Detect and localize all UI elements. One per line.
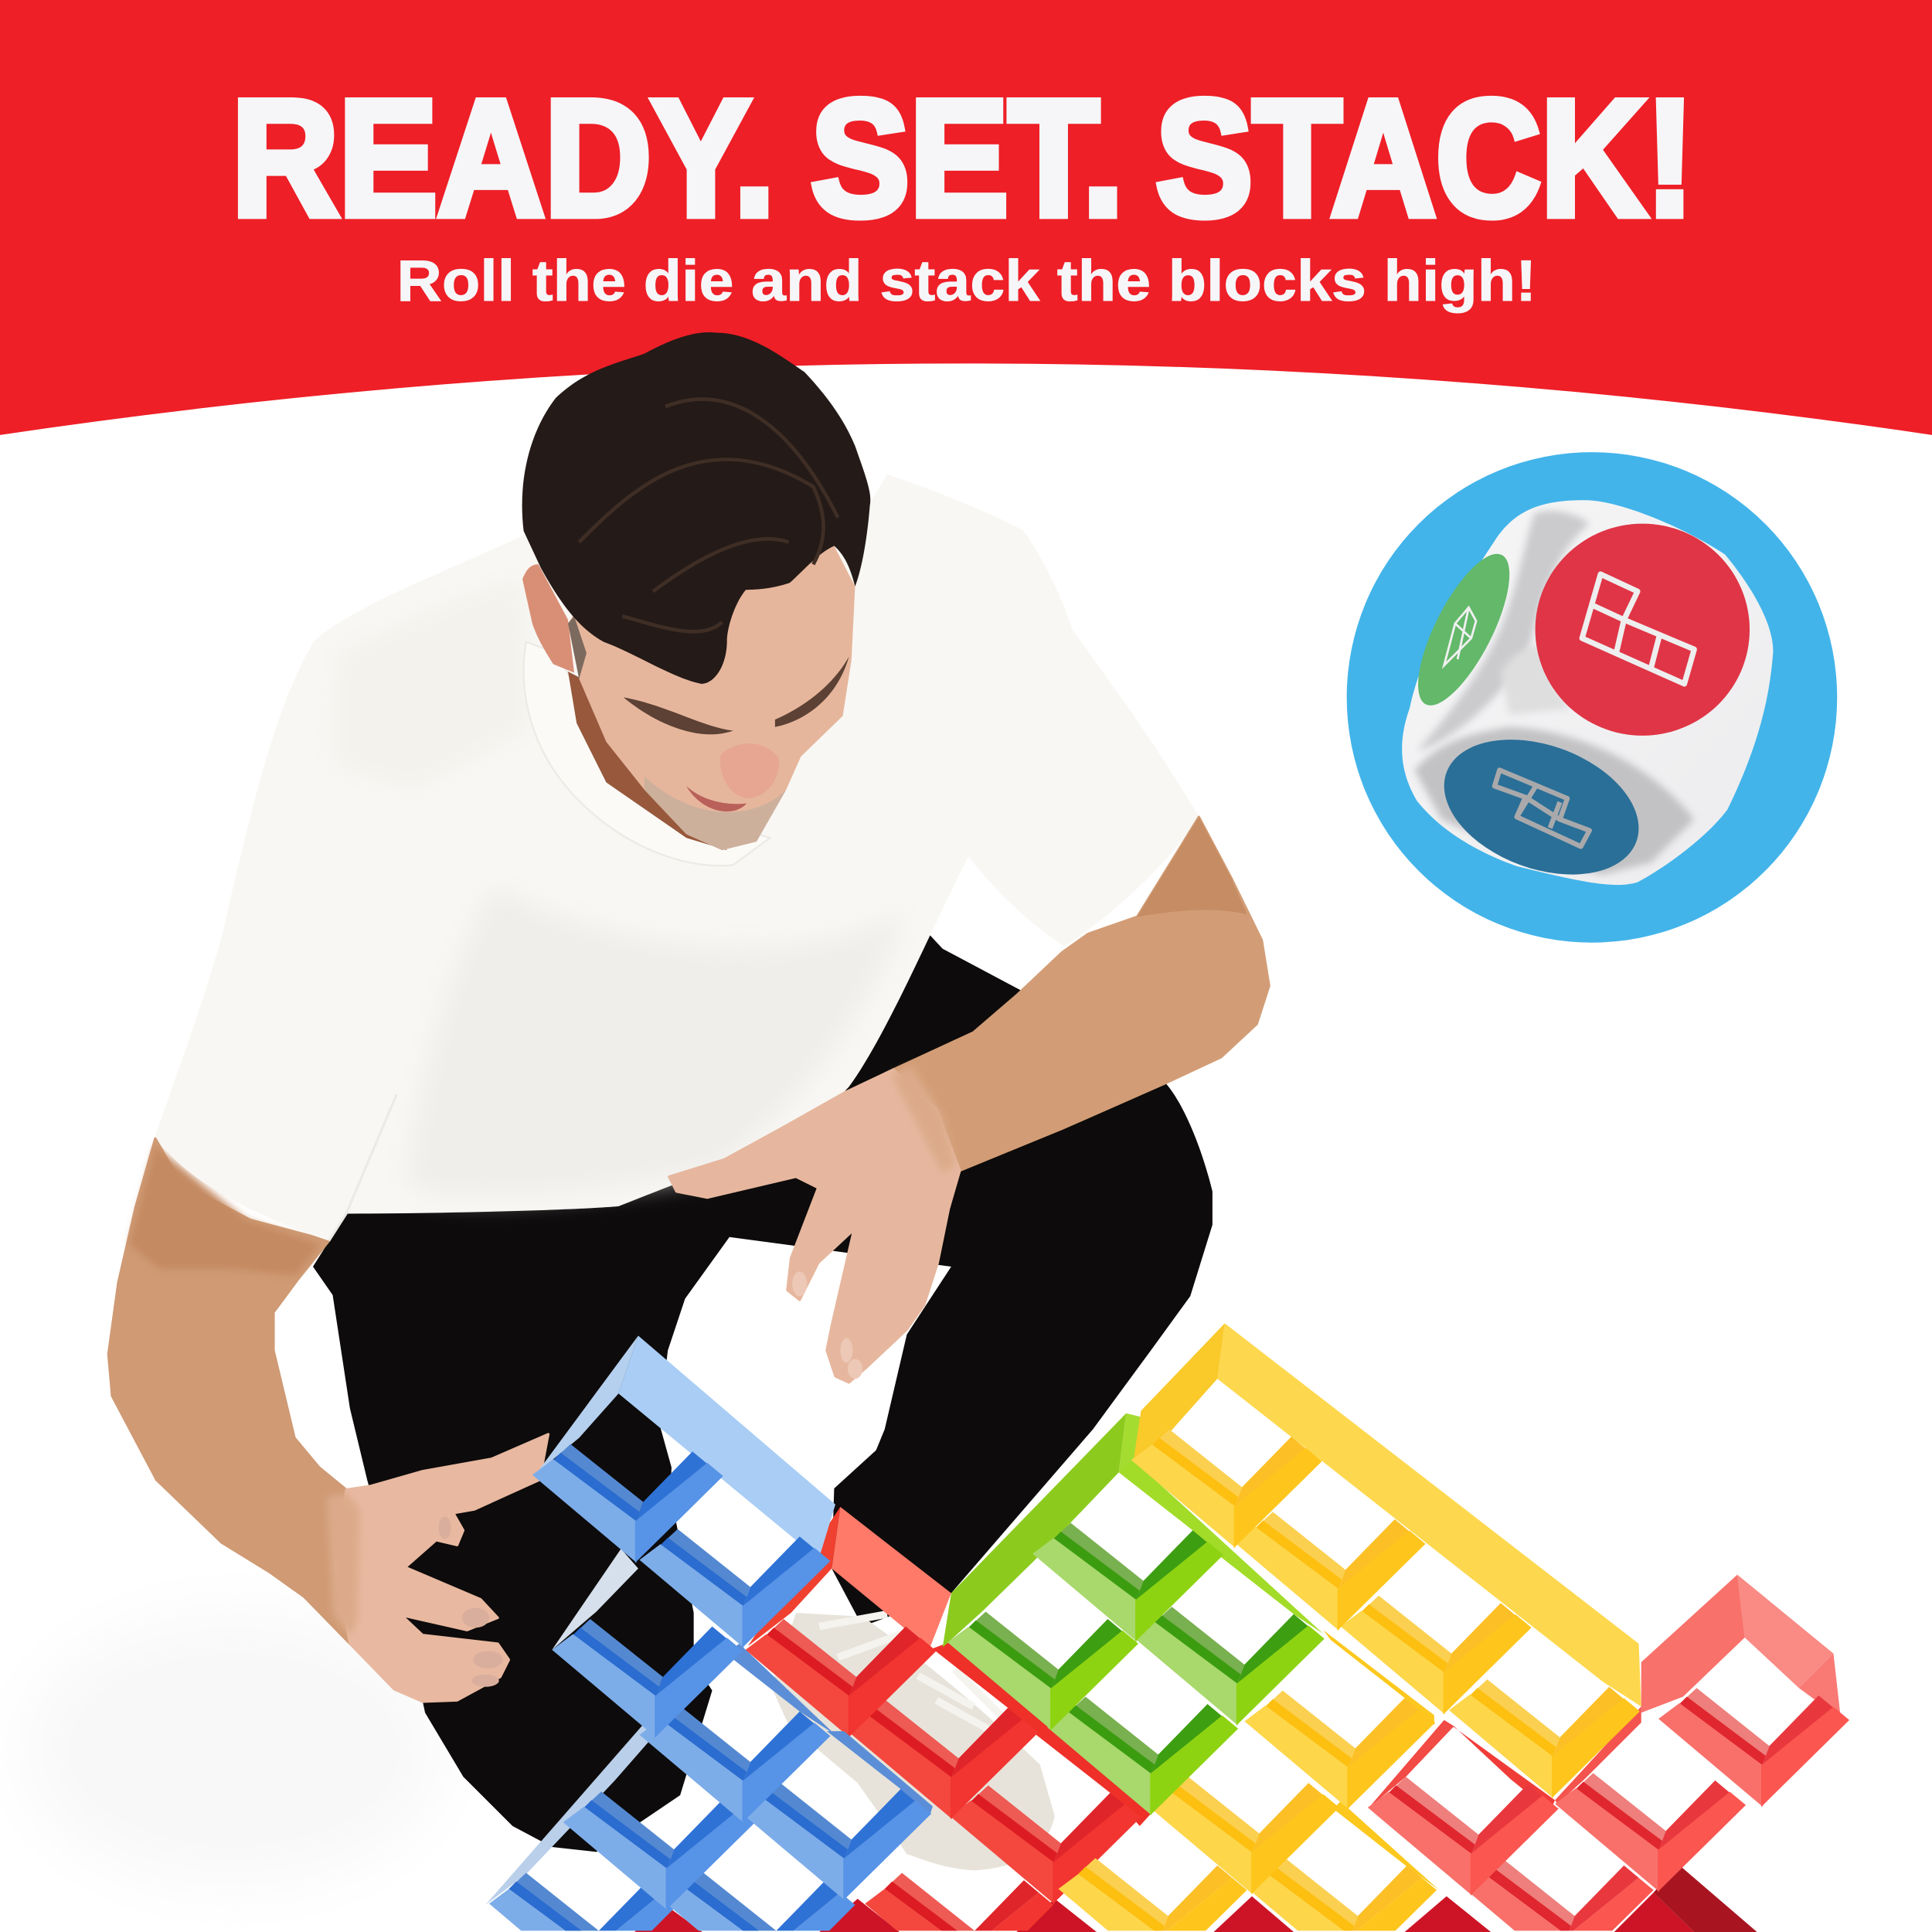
title <box>232 66 1694 250</box>
floor shadow <box>25 1614 444 1885</box>
face <box>568 543 855 850</box>
icon: blue face S block <box>1495 770 1590 846</box>
blue block: middle <box>552 1549 835 1821</box>
red header banner <box>0 0 1932 435</box>
fingernails right <box>792 1271 862 1379</box>
blue block: bottom <box>485 1719 933 1930</box>
subtitle: Roll the die and stack the blocks high! <box>396 248 1536 313</box>
blue circle <box>1347 452 1837 943</box>
arm: left of image <box>108 1138 549 1702</box>
red block: centre <box>747 1507 1151 1930</box>
right wrist blend <box>892 1066 955 1173</box>
nose <box>720 743 779 798</box>
red face <box>1536 524 1750 736</box>
eyebrow left <box>624 697 733 734</box>
stubble <box>645 776 786 850</box>
red block: right <box>1369 1575 1849 1930</box>
neck <box>568 672 727 850</box>
left hand <box>335 1434 549 1702</box>
lips <box>686 786 747 811</box>
eyebrow right <box>775 657 849 727</box>
green block <box>943 1413 1323 1814</box>
blue block: top <box>533 1335 835 1646</box>
dark hair <box>522 332 870 684</box>
fingernails left <box>439 1517 503 1687</box>
ear <box>522 564 574 673</box>
die shading <box>1414 511 1694 875</box>
man crouching <box>108 332 1269 1870</box>
green face <box>1400 542 1527 717</box>
shoe <box>771 1613 1055 1870</box>
black trousers <box>313 931 1213 1852</box>
die body <box>1402 500 1773 885</box>
dark red block faces at bottom <box>634 1864 1757 1932</box>
title: READY. <box>232 66 775 250</box>
title: STACK! <box>1156 66 1694 250</box>
sideburn <box>568 616 587 679</box>
collar <box>524 642 770 866</box>
blue face <box>1425 715 1658 900</box>
die callout <box>1347 452 1837 943</box>
white t-shirt <box>155 474 1199 1241</box>
left wrist blend <box>327 1493 360 1636</box>
title: SET. <box>811 66 1124 250</box>
arm: right of image <box>669 817 1269 1383</box>
icon: green face block <box>1444 607 1476 665</box>
yellow block: lower <box>1059 1630 1439 1930</box>
right hand <box>669 1070 960 1383</box>
yellow block: top <box>1132 1323 1641 1797</box>
icon: red face L block <box>1582 574 1694 684</box>
